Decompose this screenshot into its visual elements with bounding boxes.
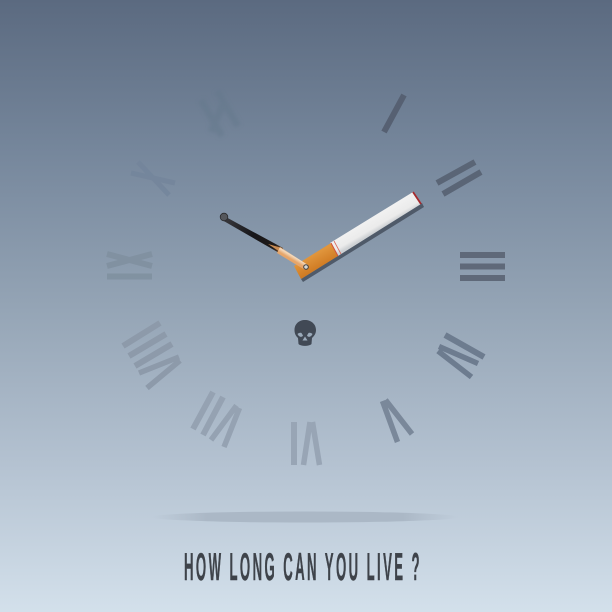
burnt tip xyxy=(413,192,421,204)
numeral XI xyxy=(201,91,238,136)
charred stick xyxy=(222,216,283,254)
numeral III xyxy=(460,255,505,278)
floating shadow ellipse xyxy=(151,512,459,522)
numeral X xyxy=(131,162,175,195)
cigarette minute hand xyxy=(294,192,424,282)
match head xyxy=(220,213,228,221)
burnt match hour hand xyxy=(220,213,308,270)
numeral II xyxy=(437,162,481,194)
cigarette shadow xyxy=(301,203,424,282)
numeral VII xyxy=(193,392,240,447)
numeral VI xyxy=(294,422,320,465)
burn sliver xyxy=(268,244,282,252)
numeral I xyxy=(384,95,404,132)
unburnt stick xyxy=(277,247,308,270)
icon: skull xyxy=(294,320,316,346)
numeral VIII xyxy=(123,323,180,388)
filter band xyxy=(331,243,338,256)
cigarette paper xyxy=(330,192,421,256)
numeral IX xyxy=(107,254,152,276)
clock face numerals xyxy=(107,91,505,465)
cigarette filter xyxy=(294,243,338,279)
numeral V xyxy=(382,400,412,442)
clock pivot xyxy=(304,265,308,269)
numeral IV xyxy=(438,335,484,377)
